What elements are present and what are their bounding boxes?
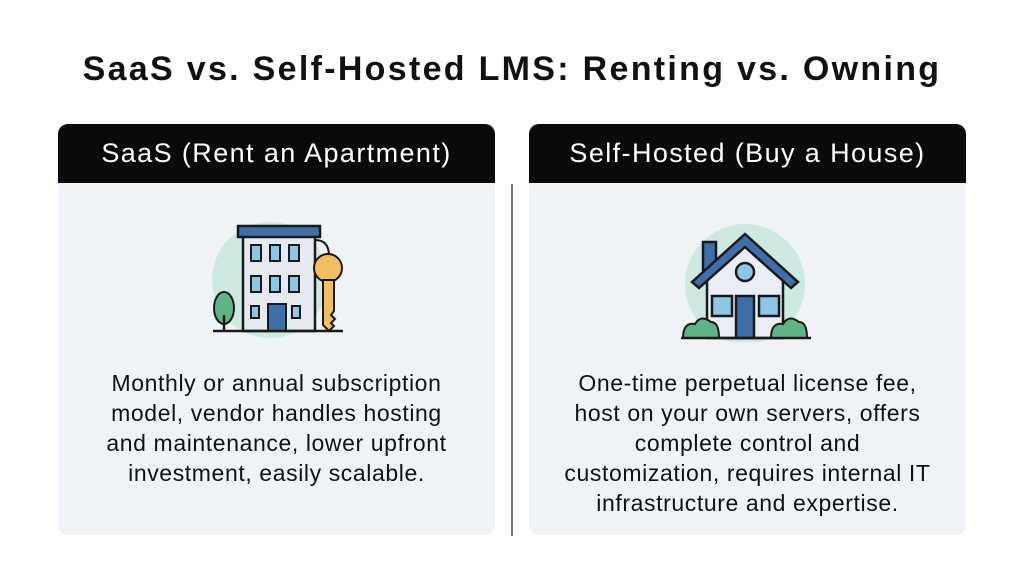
text: self-hosted: customization, requires internal IT — [564, 460, 931, 486]
text: self-hosted: One-time perpetual license fee, — [578, 370, 917, 396]
title: SaaS vs. Self-Hosted LMS: Renting vs. Owning — [83, 50, 941, 88]
text: saas: investment, easily scalable. — [128, 460, 425, 486]
header: self-hosted: Self-Hosted (Buy a House) — [569, 138, 926, 168]
text: saas: and maintenance, lower upfront — [106, 430, 447, 456]
divider — [511, 184, 513, 536]
text: self-hosted: infrastructure and expertise. — [596, 490, 899, 516]
icon: apartment with key — [212, 222, 343, 338]
text: saas: Monthly or annual subscription — [112, 370, 441, 396]
text: self-hosted: host on your own servers, offers — [574, 400, 921, 426]
text: saas — [106, 370, 447, 486]
text: self-hosted: complete control and — [635, 430, 860, 456]
text: saas: model, vendor handles hosting — [111, 400, 442, 426]
header: saas: SaaS (Rent an Apartment) — [101, 138, 452, 168]
header: saas — [58, 124, 495, 183]
panel: self-hosted — [529, 124, 966, 535]
text: self-hosted — [564, 370, 931, 516]
panel: saas — [58, 124, 495, 535]
header: self-hosted — [529, 124, 966, 183]
icon: house — [681, 224, 811, 342]
